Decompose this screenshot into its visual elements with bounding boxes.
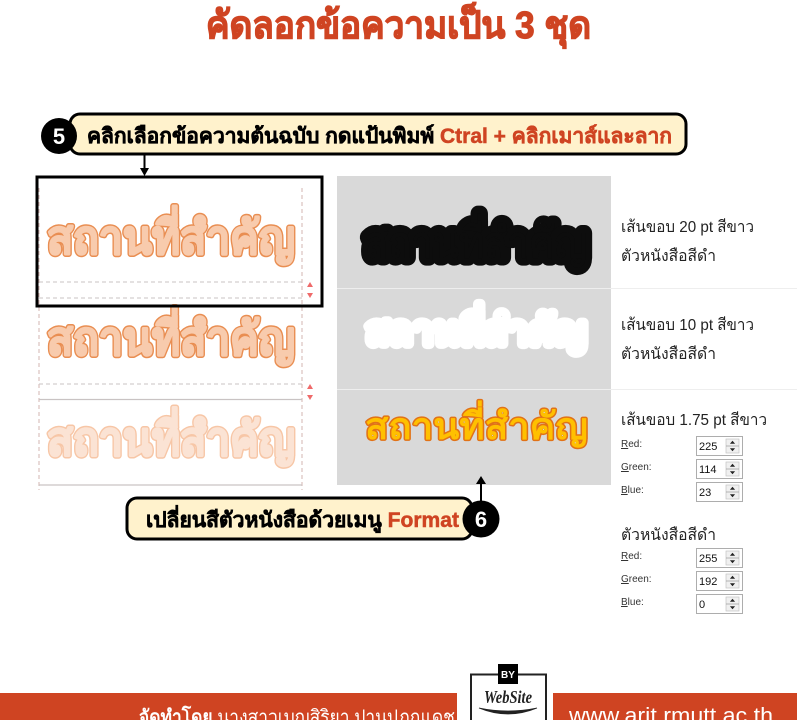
panel: coloured text versions <box>337 176 797 485</box>
label: black text with RGB values: Blue: <box>621 597 644 608</box>
text copy 2: สถานที่สำคัญ <box>47 306 295 366</box>
label: 1.75 pt outline with RGB values: 23 <box>699 487 711 499</box>
selection frame <box>37 177 322 306</box>
callout 5 <box>41 114 686 154</box>
text copy 3: สถานที่สำคัญ <box>47 407 295 466</box>
badge: by website <box>471 664 546 720</box>
badge: by website: BY <box>501 670 515 681</box>
label: 1.75 pt outline with RGB values: 114 <box>699 464 717 476</box>
label: 1.75 pt outline with RGB values <box>621 411 767 502</box>
callout 6: เปลี่ยนสีตัวหนังสือด้วยเมนู Format <box>146 504 459 534</box>
text copy 3: สถานที่สำคัญ <box>47 407 295 466</box>
text version: orange outline: สถานที่สำคัญ <box>365 400 588 448</box>
panel: original and duplicated text on slide <box>39 188 313 490</box>
label: 20 pt outline <box>621 218 754 265</box>
callout 5: 5 <box>53 124 65 149</box>
label: 10 pt outline <box>621 316 754 363</box>
text copy 1: สถานที่สำคัญ <box>47 206 295 264</box>
label: 1.75 pt outline with RGB values: 225 <box>699 441 717 453</box>
label: 20 pt outline: เส้นขอบ 20 pt สีขาว <box>621 218 754 236</box>
label: black text with RGB values <box>621 526 742 614</box>
label: black text with RGB values: Red: <box>621 551 642 562</box>
text copy 1: สถานที่สำคัญ <box>47 206 295 264</box>
label: 20 pt outline: ตัวหนังสือสีดำ <box>621 247 716 265</box>
text copy 2: สถานที่สำคัญ <box>47 306 295 366</box>
badge: by website: WebSite <box>484 687 532 707</box>
label: 10 pt outline: เส้นขอบ 10 pt สีขาว <box>621 316 754 334</box>
text version: black thick outline: สถานที่สำคัญ <box>365 213 587 268</box>
callout 5: คลิกเลือกข้อความต้นฉบับ กดแป้นพิมพ์ Ctral + คลิกเมาส์และลาก <box>87 124 672 148</box>
callout 6 <box>127 498 500 539</box>
label: 1.75 pt outline with RGB values: Blue: <box>621 485 644 496</box>
arrow: callout 6 to panel <box>476 476 486 502</box>
title: คัดลอกข้อความเป็น 3 ชุด <box>206 2 591 49</box>
footer bar <box>0 693 797 720</box>
arrow: callout 5 to frame <box>140 155 149 176</box>
label: black text with RGB values: ตัวหนังสือสีดำ <box>621 526 716 544</box>
label: black text with RGB values: 192 <box>699 576 717 588</box>
label: 1.75 pt outline with RGB values: เส้นขอบ 1.75 pt สีขาว <box>621 411 767 429</box>
label: black text with RGB values: 255 <box>699 553 717 565</box>
label: 10 pt outline: ตัวหนังสือสีดำ <box>621 345 716 363</box>
label: black text with RGB values: Green: <box>621 574 652 585</box>
label: 1.75 pt outline with RGB values: Green: <box>621 462 652 473</box>
callout 6: 6 <box>475 507 487 532</box>
label: black text with RGB values: 0 <box>699 599 705 611</box>
text version: white outline: สถานที่สำคัญ <box>366 303 586 354</box>
label: 1.75 pt outline with RGB values: Red: <box>621 439 642 450</box>
